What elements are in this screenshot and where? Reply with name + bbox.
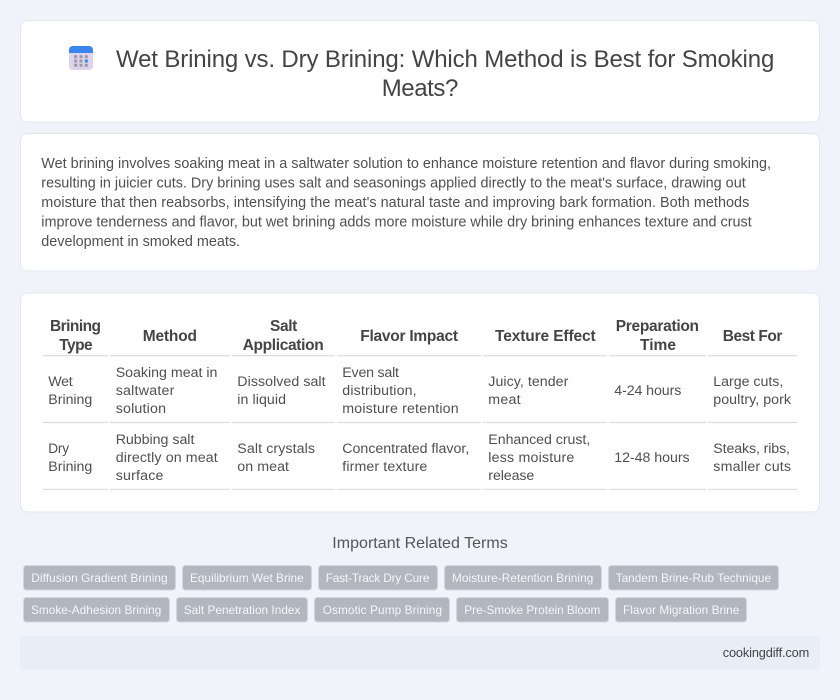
table header row: Salt — [270, 318, 297, 335]
panel: comparison table — [20, 293, 820, 512]
title: Meats? — [382, 75, 458, 102]
related terms tags: Fast-Track Dry Cure — [326, 571, 430, 585]
text block: intro paragraph: Wet brining involves soaking meat in a saltwater solution to enhance moisture retention and flavor during smoking, — [41, 156, 771, 172]
table row: dry brining: Salt crystals — [237, 441, 315, 457]
table row: dry brining: less moisture — [488, 450, 574, 466]
table row: dry brining: Dry — [48, 441, 69, 456]
table row: dry brining — [48, 432, 791, 484]
table row: wet brining: distribution, — [342, 383, 417, 399]
related terms tags: Osmotic Pump Brining — [323, 603, 442, 617]
heading: related terms: Important Related Terms — [332, 535, 508, 552]
table header row — [50, 318, 782, 354]
table header row: Brining — [50, 318, 101, 335]
related terms tags: Pre-Smoke Protein Bloom — [464, 603, 600, 617]
table row: wet brining: 4-24 hours — [614, 383, 681, 399]
table row: dry brining: surface — [116, 468, 164, 484]
table row: wet brining: Brining — [48, 392, 92, 408]
table row: wet brining: Juicy, tender — [488, 374, 569, 390]
table row: wet brining — [48, 365, 792, 417]
related terms tags: Flavor Migration Brine — [623, 603, 740, 617]
table row: dry brining: Steaks, ribs, — [713, 441, 790, 457]
table header row: Flavor Impact — [360, 328, 458, 345]
title: Wet Brining vs. Dry Brining: Which Method is Best for Smoking — [116, 46, 774, 73]
table row: dry brining: Enhanced crust, — [488, 432, 590, 448]
related terms tags: Tandem Brine-Rub Technique — [616, 571, 771, 585]
table header row: Time — [640, 337, 676, 354]
table row: wet brining: meat — [488, 392, 521, 408]
table row: wet brining: Large cuts, — [713, 374, 783, 390]
table row: wet brining: Soaking meat in — [116, 365, 217, 381]
text block: intro paragraph: resulting in juicier cuts. Dry brining uses salt and seasonings applied directly to the meat's surface, drawing out — [41, 176, 746, 192]
table row: dry brining: Rubbing salt — [116, 432, 194, 448]
table row: wet brining: Dissolved salt — [237, 374, 326, 390]
table row: dry brining: firmer texture — [342, 459, 427, 475]
table row: wet brining: moisture retention — [342, 401, 459, 417]
table row: wet brining: saltwater — [116, 383, 175, 399]
text block: intro paragraph: development in smoked meats. — [41, 234, 240, 250]
table header row: Texture Effect — [495, 328, 596, 345]
text block: intro paragraph: improve tenderness and flavor, but wet brining adds more moisture while dry brining enhances texture and crust — [41, 214, 752, 230]
related terms tags: Salt Penetration Index — [184, 603, 300, 617]
table row: wet brining: solution — [116, 401, 166, 417]
table row: dry brining: Brining — [48, 459, 92, 475]
text block: intro paragraph — [41, 156, 771, 250]
table row: wet brining: Even salt — [342, 365, 399, 381]
table header row: Application — [243, 337, 324, 354]
title — [116, 46, 774, 102]
icon: calendar — [69, 46, 93, 70]
related terms tags: Smoke-Adhesion Brining — [31, 603, 161, 617]
table row: dry brining: directly on meat — [116, 450, 218, 466]
table header row: Method — [143, 328, 197, 345]
table header row: Preparation — [616, 318, 699, 335]
table row: wet brining: poultry, pork — [713, 392, 792, 408]
related terms tags: Moisture-Retention Brining — [452, 571, 593, 585]
table row: dry brining: 12-48 hours — [614, 450, 690, 466]
table row: dry brining: on meat — [237, 459, 289, 475]
related terms tags: Diffusion Gradient Brining — [31, 571, 168, 585]
related terms tags: Equilibrium Wet Brine — [190, 571, 304, 585]
panel: header — [20, 20, 820, 122]
table row: wet brining: in liquid — [237, 392, 286, 408]
table row: wet brining: Wet — [48, 374, 73, 390]
text block: intro paragraph: moisture that then reabsorbs, intensifying the meat's natural taste and improving bark formation. Both methods — [41, 195, 749, 211]
table header row: Best For — [723, 328, 782, 345]
table row: dry brining: release — [488, 468, 534, 484]
table row: dry brining: Concentrated flavor, — [342, 441, 469, 457]
related terms tags — [24, 566, 778, 622]
panel: introduction text — [20, 134, 820, 271]
footer band — [20, 636, 820, 670]
table header row: Type — [59, 337, 93, 354]
table row: dry brining: smaller cuts — [713, 459, 791, 475]
footer band: cookingdiff.com — [723, 645, 809, 660]
